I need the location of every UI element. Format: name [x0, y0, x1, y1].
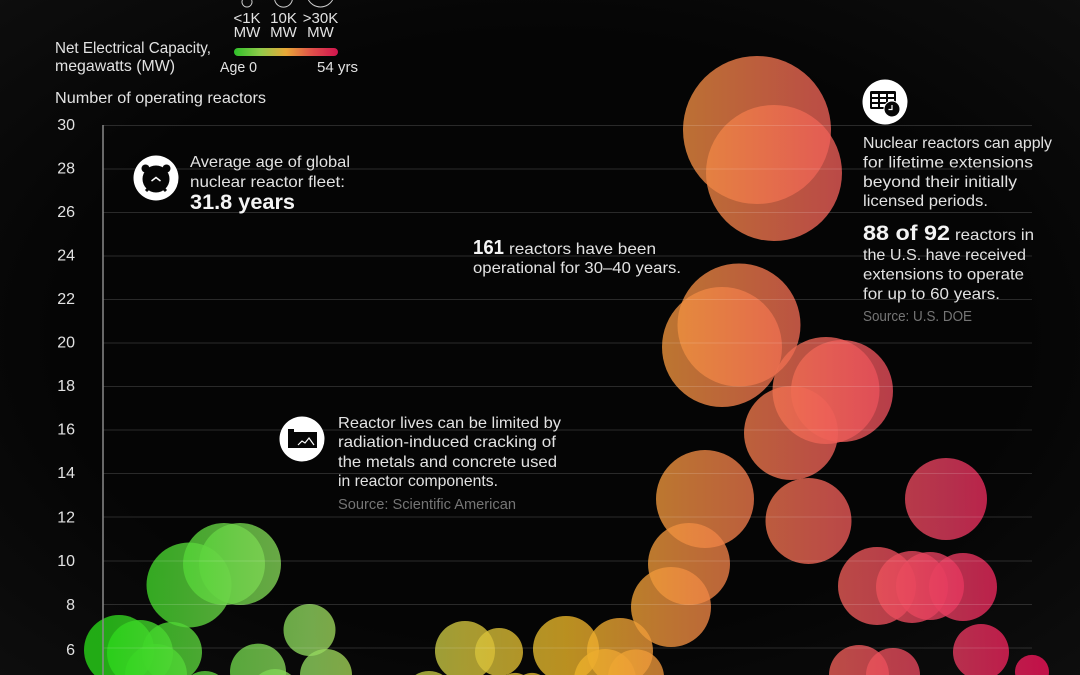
bubbles: mid-age reactors (yellow to orange) [415, 450, 754, 675]
legend title: megawatts (MW) [55, 58, 175, 75]
callout: lifetime extensions: for lifetime extensions [863, 154, 1033, 172]
callout: 161 reactors: 161 [473, 237, 504, 259]
callout: 161 reactors: operational for 30–40 years. [473, 260, 681, 277]
y axis labels: 22 [57, 291, 75, 308]
callout: radiation cracking [280, 415, 561, 513]
y axis labels: 18 [57, 378, 75, 395]
callout: radiation cracking: in reactor components. [338, 473, 498, 490]
callout: lifetime extensions: reactors in [955, 227, 1034, 244]
legend: age colour scale: 54 yrs [317, 59, 358, 76]
y axis labels: 16 [57, 422, 75, 438]
icon: alarm clock [134, 156, 178, 200]
callout: lifetime extensions: 88 of 92 [863, 222, 950, 245]
callout: radiation cracking: Source: Scientific American [338, 496, 516, 513]
y axis title: Number of operating reactors [55, 90, 266, 107]
callout: lifetime extensions: extensions to operate [863, 266, 1024, 284]
callout: radiation cracking: radiation-induced cracking of [338, 434, 557, 451]
legend: bubble size: 10K [270, 10, 297, 27]
legend: bubble size: >30K [303, 10, 338, 27]
y axis labels: 10 [57, 553, 75, 570]
callout: radiation cracking: Reactor lives can be limited by [338, 415, 561, 432]
callout: average age [134, 154, 350, 214]
legend: bubble size: MW [307, 24, 335, 41]
callout: lifetime extensions: for up to 60 years. [863, 286, 1000, 303]
callout: average age: 31.8 years [190, 191, 295, 214]
callout: 161 reactors [473, 237, 681, 277]
legend: bubble size: MW [270, 24, 298, 41]
callout: lifetime extensions: beyond their initially [863, 174, 1017, 191]
legend: bubble size: MW [234, 24, 261, 41]
callout: lifetime extensions: Source: U.S. DOE [863, 308, 972, 325]
callout: lifetime extensions [862, 80, 1052, 325]
icon: calendar with clock [862, 80, 908, 124]
callout: lifetime extensions: Nuclear reactors can apply [863, 135, 1052, 152]
icon: cracked material [280, 416, 324, 462]
legend: bubble size [233, 0, 338, 41]
y axis labels: 26 [57, 204, 75, 221]
bubbles: new reactors (green) [84, 523, 352, 675]
legend: bubble size: <1K [233, 10, 261, 27]
y axis labels: 6 [66, 642, 75, 659]
bubbles: 30 to 40 year old reactors (orange to red) [662, 56, 893, 564]
callout: lifetime extensions: licensed periods. [863, 193, 988, 210]
chart grid lines [103, 126, 1032, 648]
legend: age colour scale: Age 0 [220, 59, 257, 76]
y axis labels: 20 [57, 334, 75, 352]
callout: average age: Average age of global [190, 154, 350, 171]
bubbles: oldest reactors (red) [829, 458, 1049, 675]
callout: radiation cracking: the metals and concrete used [338, 454, 557, 471]
callout: average age: nuclear reactor fleet: [190, 174, 345, 191]
y axis line [102, 125, 104, 675]
y axis labels: 24 [57, 248, 75, 264]
y axis labels: 14 [57, 465, 75, 482]
legend: age colour scale [220, 48, 358, 76]
callout: lifetime extensions: the U.S. have received [863, 247, 1026, 264]
y axis labels: 30 [57, 117, 75, 134]
legend title [55, 40, 211, 75]
callout: 161 reactors: reactors have been [509, 241, 656, 258]
y axis labels [57, 117, 75, 659]
y axis labels: 12 [57, 510, 75, 526]
y axis labels: 28 [57, 160, 75, 178]
y axis labels: 8 [66, 597, 75, 614]
legend title: Net Electrical Capacity, [55, 40, 211, 57]
